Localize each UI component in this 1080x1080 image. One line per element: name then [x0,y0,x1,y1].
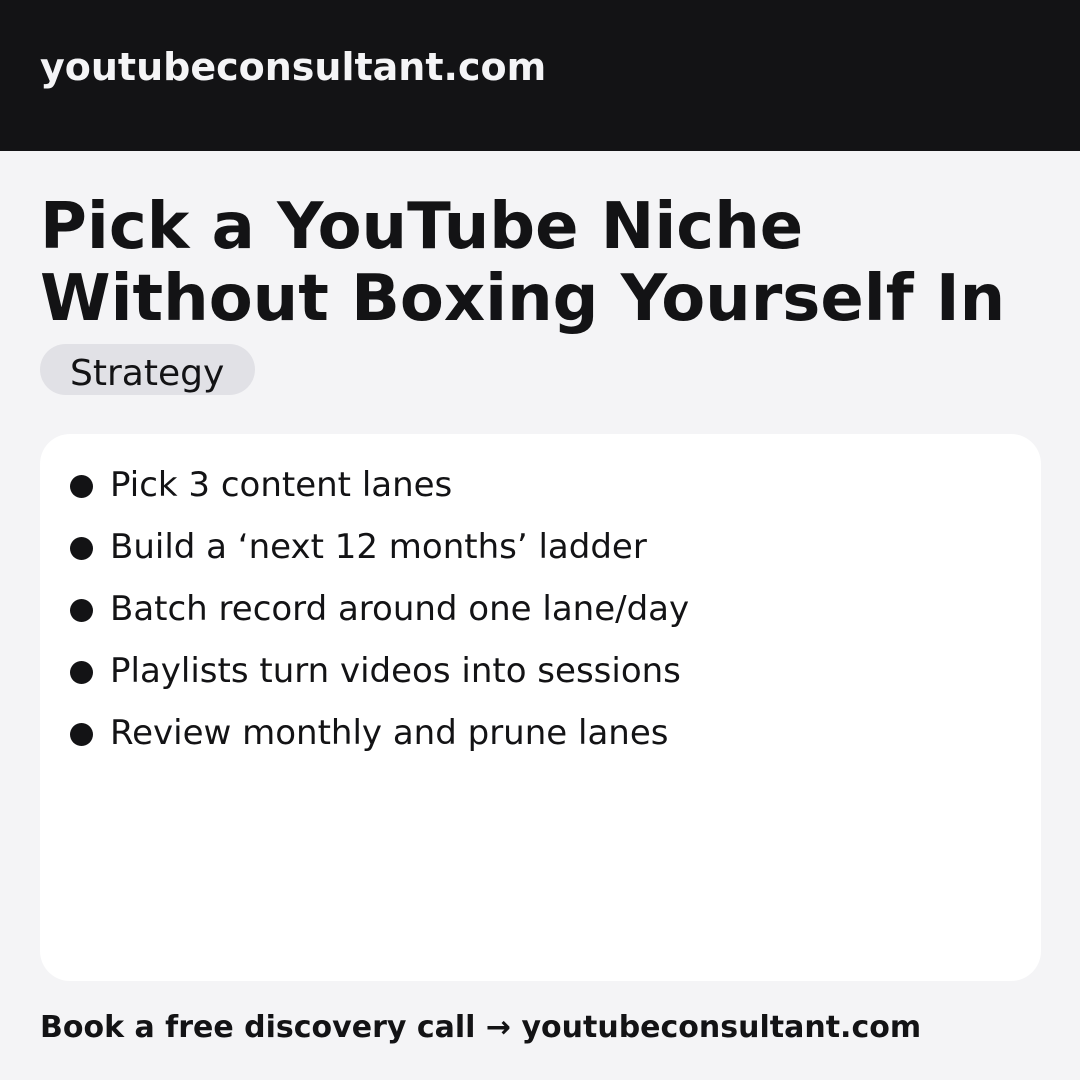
header bar [0,0,1080,151]
tag pill: Strategy: Strategy [70,353,224,394]
brand name: youtubeconsultant.com [40,45,546,89]
bullet 1: Pick 3 content lanes [110,465,452,505]
title [40,190,1005,336]
bullet 4: Playlists turn videos into sessions [110,651,681,691]
tag pill: Strategy [40,344,255,395]
title: Without Boxing Yourself In [40,262,1005,336]
bullet 3: Batch record around one lane/day [110,589,689,629]
panel: bullet list [40,434,1041,981]
title: Pick a YouTube Niche [40,190,803,264]
bullet 5: Review monthly and prune lanes [110,713,668,753]
bullet 2: Build a ‘next 12 months’ ladder [110,527,647,567]
footer call to action: Book a free discovery call → youtubeconsultant.com [40,1010,921,1045]
